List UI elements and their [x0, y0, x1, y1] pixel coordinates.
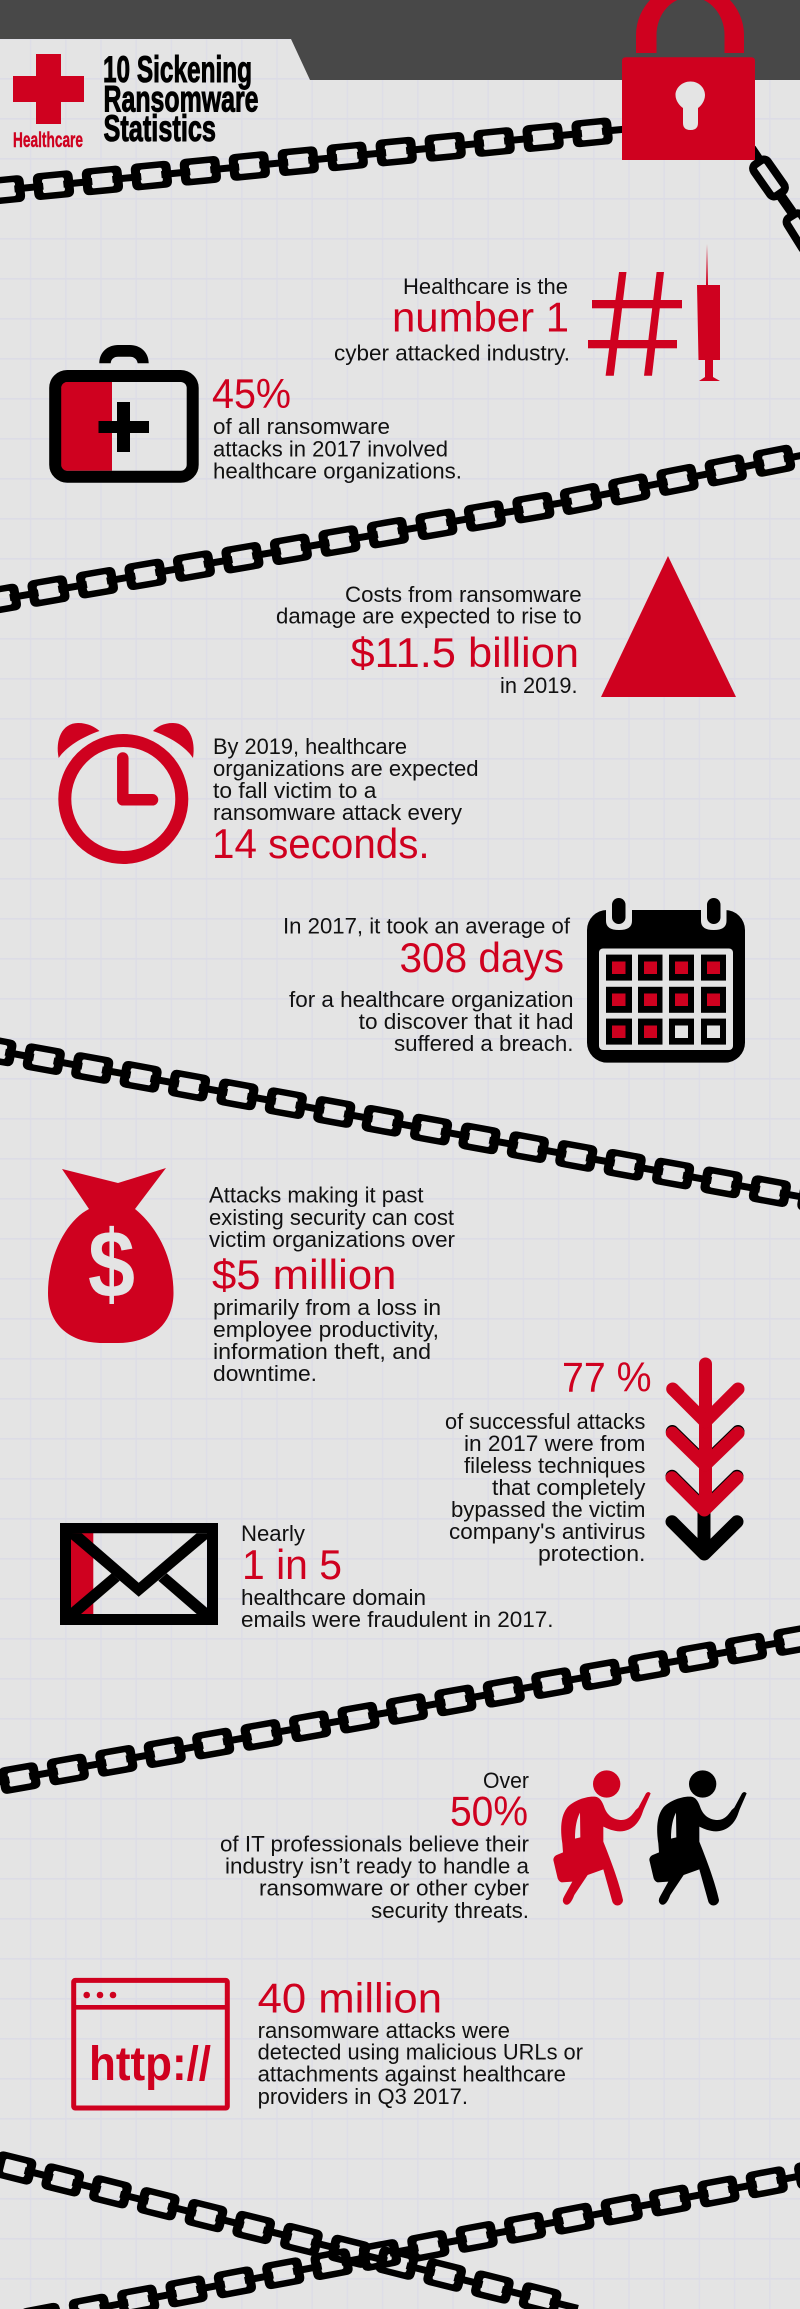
stat text: 40 million: ransomware attacks were [258, 2018, 510, 2043]
stat text: 77 percent: that completely [492, 1475, 646, 1500]
stat text: 308 days: for a healthcare organization [289, 987, 574, 1012]
stat text: 11.5 billion: Costs from ransomware [345, 582, 582, 607]
stat text: number 1: Healthcare is the [403, 274, 568, 299]
chain: second [0, 430, 800, 616]
stat text: 5 million: downtime. [213, 1361, 317, 1386]
stat text: 308 days [283, 914, 574, 1056]
stat: 45 percent [55, 345, 462, 484]
stat: 50 percent [220, 1768, 747, 1923]
stat text: 77 percent: company's antivirus [449, 1519, 645, 1544]
stat text: 45 percent: 45% [212, 370, 291, 417]
chain: right of padlock [751, 148, 800, 253]
icon: two walking businesspeople [553, 1770, 747, 1905]
stat text: 5 million: $5 million [212, 1251, 396, 1298]
icon: black figure [649, 1770, 747, 1905]
stat text: 5 million: primarily from a loss in [213, 1295, 441, 1320]
icon: alarm clock [58, 723, 194, 858]
stat text: 40 million: attachments against healthcare [258, 2062, 566, 2087]
stat text: 50 percent [220, 1768, 530, 1923]
stat text: 1 in 5: 1 in 5 [242, 1541, 342, 1588]
stat text: number 1 [334, 274, 570, 366]
stat: 1 in 5 [60, 1521, 554, 1632]
stat: 40 million [72, 1975, 583, 2109]
icon: money bag [48, 1168, 174, 1343]
logo: healthcare cross [13, 54, 84, 152]
stat text: number 1: cyber attacked industry. [334, 340, 570, 366]
stat text: 77 percent [445, 1354, 652, 1566]
icon: browser window with http: http:// [89, 2038, 211, 2091]
title: Statistics [104, 108, 216, 149]
header band [0, 0, 800, 80]
stat text: number 1: number 1 [392, 294, 569, 340]
icon: padlock [622, 0, 755, 160]
stat text: 14 seconds: By 2019, healthcare [213, 734, 407, 759]
stat text: 5 million [209, 1183, 455, 1386]
stat text: 14 seconds: ransomware attack every [213, 800, 463, 825]
stat text: 308 days: to discover that it had [359, 1009, 574, 1034]
stat text: 77 percent: fileless techniques [464, 1453, 645, 1478]
icon: money bag: $ [88, 1211, 135, 1318]
stat text: 14 seconds: organizations are expected [213, 756, 479, 781]
stat text: 5 million: victim organizations over [209, 1227, 455, 1252]
stat text: 14 seconds: to fall victim to a [213, 778, 377, 803]
stat text: 11.5 billion [276, 582, 582, 698]
stat text: 45 percent: of all ransomware [213, 414, 390, 439]
stat text: 40 million [258, 1975, 583, 2109]
stat text: 1 in 5 [241, 1521, 554, 1632]
stat: 11.5 billion [276, 556, 736, 698]
icon: rising triangle [601, 556, 736, 697]
stat text: 50 percent: security threats. [371, 1898, 529, 1923]
stat text: 77 percent: bypassed the victim [451, 1497, 645, 1522]
stat text: 5 million: information theft, and [213, 1339, 431, 1364]
stat text: 11.5 billion: in 2019. [500, 673, 578, 698]
logo: healthcare cross: Healthcare [13, 129, 83, 152]
chain: top left to padlock [0, 115, 632, 205]
icon: hash sign with syringe [588, 244, 720, 381]
stat text: 5 million: Attacks making it past [209, 1183, 424, 1208]
stat: 308 days [283, 898, 745, 1063]
stat text: 40 million: detected using malicious URLs or [258, 2040, 583, 2065]
stat text: 77 percent: in 2017 were from [464, 1431, 645, 1456]
icon: red figure [553, 1770, 651, 1905]
icon: medical kit [55, 345, 193, 477]
stat text: 45 percent [212, 370, 462, 484]
stat text: 308 days: In 2017, it took an average of [283, 914, 571, 939]
stat text: 50 percent: 50% [450, 1787, 528, 1834]
stat text: 5 million: employee productivity, [213, 1317, 439, 1342]
stat text: 1 in 5: emails were fraudulent in 2017. [241, 1607, 554, 1632]
stat text: 45 percent: attacks in 2017 involved [213, 436, 448, 462]
chain: fourth [0, 1620, 800, 1803]
stat text: 308 days: suffered a breach. [394, 1031, 574, 1056]
stat text: 40 million: providers in Q3 2017. [258, 2084, 468, 2109]
stat text: 40 million: 40 million [258, 1975, 442, 2022]
stat text: 11.5 billion: $11.5 billion [350, 629, 579, 676]
stat: 14 seconds [58, 723, 479, 867]
stat text: 45 percent: healthcare organizations. [213, 458, 462, 484]
stat: 77 percent [445, 1354, 738, 1566]
title: Ransomware [104, 78, 258, 120]
stat: 5 million [48, 1168, 455, 1386]
icon: browser window with http [72, 1980, 228, 2108]
stat text: 50 percent: industry isn’t ready to handle a [225, 1854, 529, 1879]
stat text: 77 percent: of successful attacks [445, 1409, 645, 1434]
stat text: 5 million: existing security can cost [209, 1205, 455, 1230]
stat text: 77 percent: 77 % [562, 1354, 652, 1401]
stat text: 50 percent: Over [483, 1768, 529, 1793]
chain: third [0, 1034, 800, 1220]
stat text: 14 seconds [212, 734, 479, 867]
stat text: 308 days: 308 days [400, 934, 564, 981]
stat: number 1 [334, 244, 720, 381]
icon: envelope [60, 1523, 218, 1625]
stat text: 50 percent: ransomware or other cyber [259, 1876, 530, 1901]
icon: downward chevron arrow [672, 1364, 738, 1554]
title: 10 Sickening [103, 49, 252, 90]
stat text: 11.5 billion: damage are expected to rise to [276, 604, 582, 629]
stat text: 50 percent: of IT professionals believe their [220, 1832, 529, 1856]
stat text: 77 percent: protection. [538, 1541, 645, 1566]
stat text: 1 in 5: Nearly [241, 1521, 306, 1546]
chains: crossing pair at bottom [0, 2144, 800, 2309]
icon: calendar [587, 898, 745, 1063]
stat text: 14 seconds: 14 seconds. [212, 820, 430, 867]
stat text: 1 in 5: healthcare domain [241, 1585, 426, 1610]
title [103, 49, 258, 149]
